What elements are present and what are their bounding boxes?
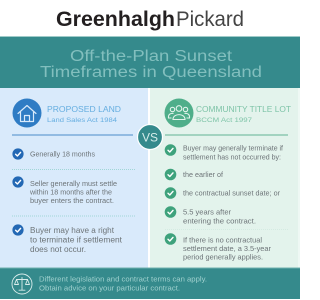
item: contractual sunset date (165, 187, 281, 199)
panel: community title lot (150, 88, 300, 268)
logo: Greenhalgh (56, 8, 175, 31)
heading: community title lot: COMMUNITY TITLE LOT (196, 104, 292, 114)
icon: house (12, 98, 42, 128)
icon: people group (164, 98, 194, 128)
subheading: land sales act: Land Sales Act 1984 (47, 117, 117, 124)
logo (56, 8, 244, 31)
item: buyer right to terminate: Buyer may have a right (30, 226, 115, 235)
subheading: bccm act: BCCM Act 1997 (196, 117, 252, 124)
title banner: Timeframes in Queensland (40, 64, 262, 81)
icon: scales of justice (12, 274, 32, 294)
item: 5.5 years: 5.5 years after (183, 208, 232, 216)
item: buyer right to terminate: does not occur. (30, 245, 86, 254)
logo: Pickard (176, 8, 244, 31)
footer note: Obtain advice on your particular contract. (39, 284, 180, 292)
vs badge (138, 124, 162, 150)
item: the earlier of (165, 169, 224, 180)
item: contractual sunset date: the contractual sunset date; or (183, 188, 281, 198)
footer note: Different legislation and contract terms can apply. (39, 274, 207, 284)
item: 5.5 years: entering the contract. (183, 216, 256, 226)
footer banner (0, 268, 300, 299)
heading: proposed land: PROPOSED LAND (47, 104, 121, 114)
item: no contractual date: period generally applies. (183, 252, 263, 262)
item: the earlier of: the earlier of (183, 170, 224, 179)
item: buyer may terminate: Buyer may generally terminate if (183, 144, 284, 152)
item: generally 18 months (12, 148, 95, 160)
title banner: Off-the-Plan Sunset (70, 48, 233, 65)
item: 5.5 years (165, 206, 256, 226)
item: no contractual date: If there is no contractual (183, 236, 262, 244)
item: no contractual date (165, 233, 272, 262)
item: seller must settle (12, 176, 117, 205)
title banner (0, 36, 300, 88)
vs badge: VS (142, 130, 158, 144)
item: buyer right to terminate: to terminate if settlement (30, 236, 123, 245)
item: seller must settle: within 18 months after the (29, 188, 112, 196)
item: seller must settle: Seller generally must settle (30, 179, 117, 188)
item: seller must settle: buyer enters the contract. (30, 196, 114, 205)
item: buyer may terminate: settlement has not occurred by: (183, 152, 281, 162)
item: buyer right to terminate (12, 224, 123, 254)
item: buyer may terminate (165, 144, 284, 162)
item: no contractual date: settlement date, a 3.5-year (183, 244, 272, 253)
footer note (39, 274, 207, 292)
panel: proposed land (0, 88, 148, 268)
item: generally 18 months: Generally 18 months (30, 150, 95, 158)
